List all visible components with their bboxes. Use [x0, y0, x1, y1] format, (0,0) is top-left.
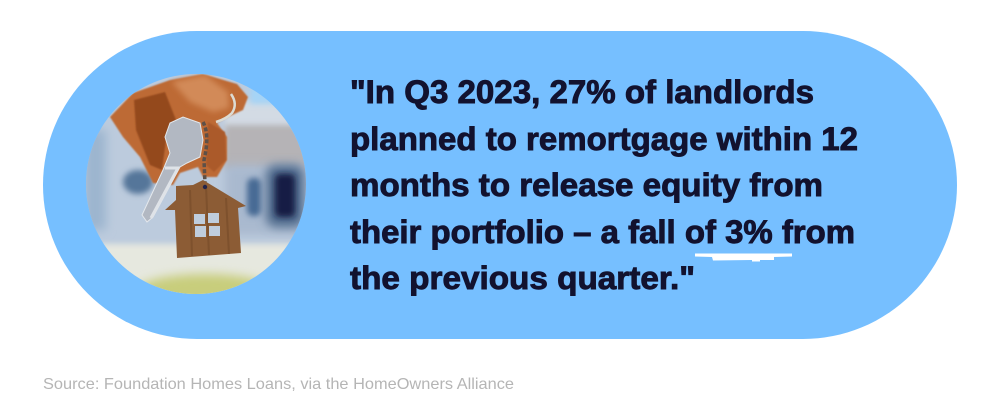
quote text: planned to remortgage within 12 — [350, 121, 858, 157]
house keyring — [165, 180, 246, 258]
quote text — [350, 74, 858, 296]
quote text: months to release equity from — [350, 167, 823, 203]
hand — [110, 74, 248, 185]
key — [142, 117, 203, 222]
panel: blue quote pill — [43, 31, 957, 339]
hand-drawn white underline — [695, 254, 792, 262]
finger ring — [216, 94, 235, 122]
source note: Source: Foundation Homes Loans, via the HomeOwners Alliance — [43, 376, 514, 393]
photo: hand holding key with house keyring — [86, 74, 306, 294]
quote text: their portfolio – a fall of 3% from — [350, 214, 855, 250]
key chain — [203, 122, 207, 184]
quote text: "In Q3 2023, 27% of landlords — [350, 74, 814, 110]
quote text: the previous quarter." — [350, 260, 695, 296]
